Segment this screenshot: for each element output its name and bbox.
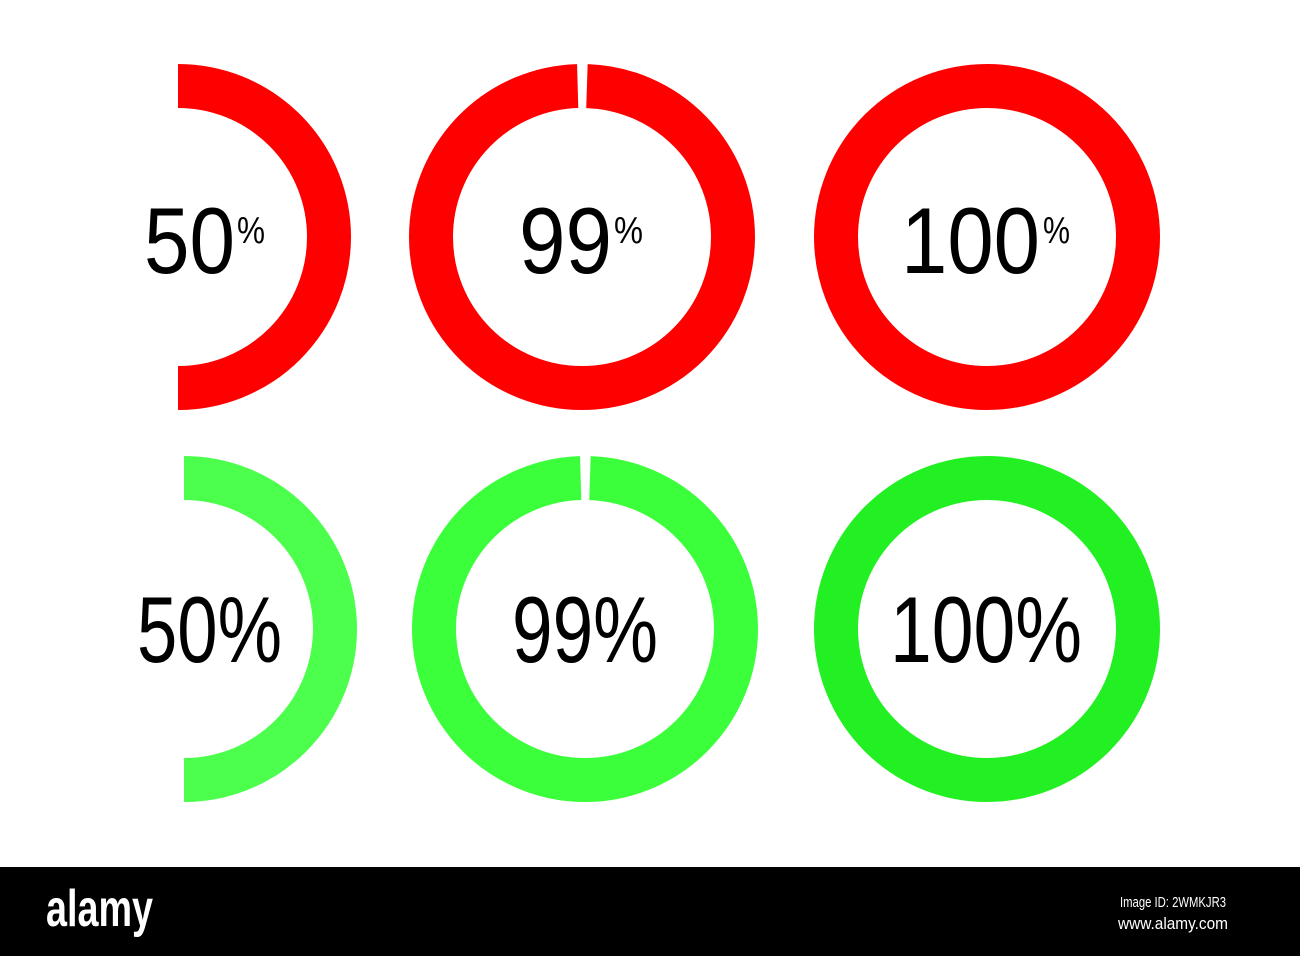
label: red 50: % <box>237 210 265 252</box>
label: red 100: % <box>1043 210 1070 252</box>
label: green 99%: 99% <box>512 577 658 682</box>
logo: alamy: alamy <box>46 880 153 938</box>
footer bar <box>0 867 1300 956</box>
label: green 50%: 50% <box>137 577 282 682</box>
panel: green 99% ring <box>434 478 736 780</box>
website: www.alamy.com <box>1117 914 1228 933</box>
label: red 100: 100 <box>901 188 1040 293</box>
panel: red 100% ring <box>836 86 1138 388</box>
label: red 99: 99 <box>519 188 612 293</box>
label: red 99: % <box>614 210 643 252</box>
panel: green 50% ring <box>137 478 335 780</box>
panel: red 50% ring <box>144 86 329 388</box>
image id: Image ID: 2WMKJR3 <box>1120 894 1226 911</box>
label: red 50: 50 <box>144 188 235 293</box>
panel: green 100% ring <box>836 478 1138 780</box>
label: green 100%: 100% <box>890 577 1082 682</box>
panel: red 99% ring <box>431 86 733 388</box>
